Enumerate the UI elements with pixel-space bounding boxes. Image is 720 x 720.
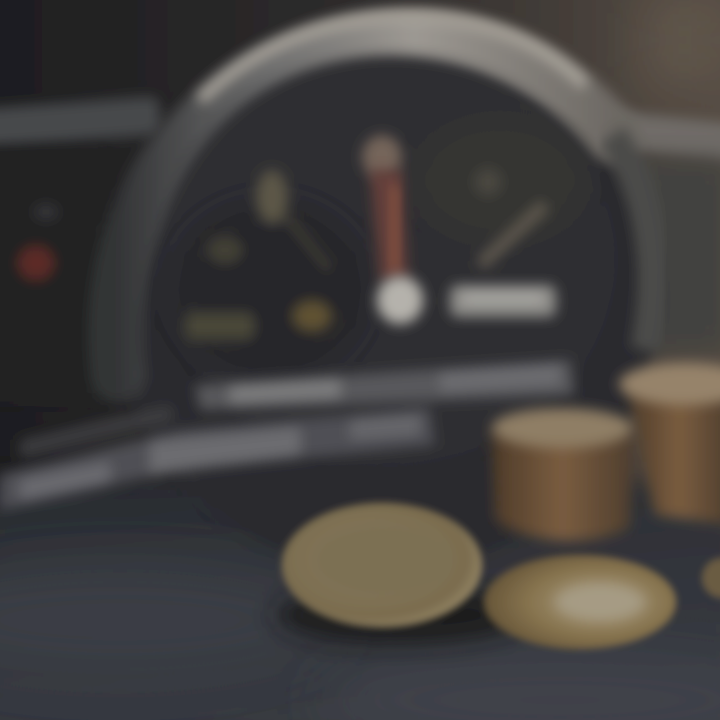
gauge tick marks and labels: [185, 168, 545, 340]
edge coin at right: [702, 558, 720, 598]
far right coin stack: [619, 363, 720, 525]
gauge needle: [362, 135, 408, 280]
bright readout bar: [450, 285, 556, 317]
side bar: right housing: [588, 109, 720, 350]
large flat coin: [282, 503, 482, 627]
red warning light: [17, 245, 55, 281]
second flat coin: [484, 555, 676, 649]
middle coin stack: [492, 408, 632, 541]
table surface: [0, 480, 720, 720]
side bar: left housing: [0, 96, 161, 400]
gauge outer ring: [113, 16, 657, 572]
needle hub: [377, 276, 423, 324]
coin shadows: [275, 587, 525, 643]
small left indicator: [32, 202, 60, 222]
lower scale bands: [0, 360, 575, 510]
gauge dial face: [164, 55, 616, 465]
